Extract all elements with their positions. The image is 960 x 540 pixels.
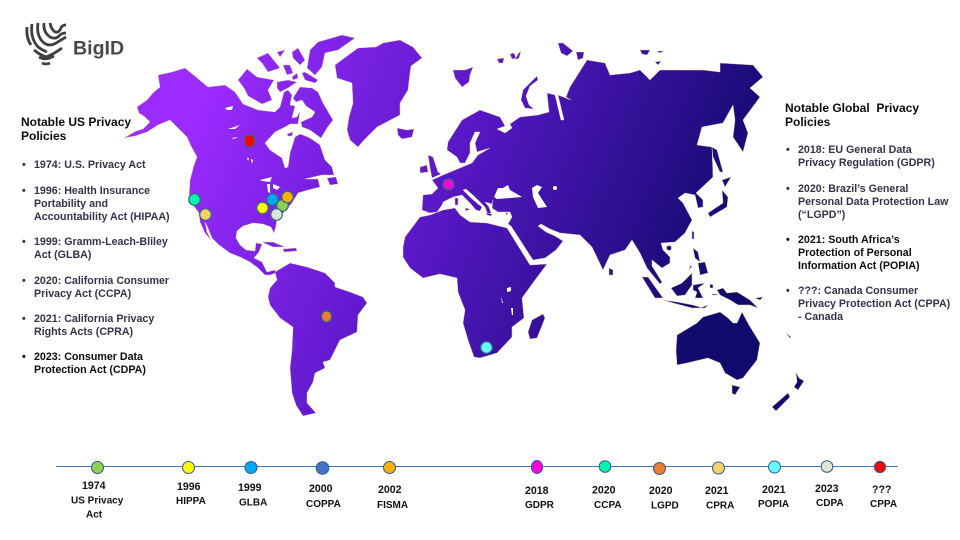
policy list: Protection Act (CDPA) (34, 364, 146, 376)
Ireland (420, 165, 428, 173)
milestone labels: 1996 (177, 481, 201, 493)
Eurasia (422, 60, 763, 284)
milestone labels: 2023 (815, 483, 839, 495)
marker: Canada CPPA (244, 135, 255, 147)
heading: Notable US Privacy (21, 115, 131, 129)
Iceland (397, 128, 414, 139)
policy list: 2021: California Privacy (34, 313, 154, 325)
milestone labels: GDPR (525, 500, 555, 511)
Timor (700, 305, 708, 308)
Great Britain (428, 155, 441, 178)
marker: LGPD (322, 311, 332, 322)
Severnaya Zemlya (558, 43, 584, 60)
marker: California CCPA (189, 194, 200, 205)
Novaya Zemlya (521, 76, 538, 109)
policy list: • (22, 313, 26, 325)
marker: CDPA (271, 209, 282, 220)
South America (268, 263, 367, 416)
Arctic islands (277, 50, 285, 57)
policy list: • (22, 185, 26, 197)
policy list: 2023: Consumer Data (34, 351, 143, 363)
milestone labels: Act (86, 510, 103, 520)
milestone labels: LGPD (651, 500, 679, 512)
marker: HIPPA (257, 202, 268, 214)
policy list: • (786, 234, 790, 246)
Caribbean islands (262, 242, 297, 252)
milestone labels: GLBA (239, 498, 267, 508)
Tasmania (732, 385, 740, 395)
marker: GLBA (267, 194, 278, 205)
Franz Josef Land (497, 51, 521, 63)
milestone labels: CPPA (870, 499, 897, 510)
Borneo (671, 273, 692, 296)
Greenland (335, 40, 422, 147)
Africa (403, 208, 547, 358)
panel: global privacy policies (785, 101, 951, 323)
Japan (708, 190, 728, 217)
milestone labels: COPPA (306, 499, 341, 510)
panel: US privacy policies (21, 115, 170, 376)
Baffin Island (293, 87, 333, 138)
milestone labels: 2020 (592, 484, 616, 496)
marker: FISMA (282, 191, 293, 203)
policy list: 2020: California Consumer (34, 275, 169, 287)
policy list: • (786, 285, 790, 297)
milestone labels: CCPA (594, 500, 622, 511)
Java (663, 300, 703, 308)
milestone labels: 1999 (238, 482, 262, 494)
policy list: Information Act (POPIA) (798, 260, 920, 272)
icon: fingerprint shield (27, 23, 66, 64)
Victoria Island (238, 69, 274, 104)
milestone labels: POPIA (758, 499, 789, 510)
Caspian Sea (532, 185, 547, 208)
heading: Policies (785, 115, 831, 129)
milestone labels: 2000 (309, 483, 333, 495)
policy list: • (22, 236, 26, 248)
policy list: 1996: Health Insurance (34, 185, 150, 197)
policy list: 2018: EU General Data (798, 144, 912, 156)
milestone labels: US Privacy (71, 496, 124, 506)
policy list: Rights Acts (CPRA) (34, 326, 134, 338)
marker: California CPRA (200, 209, 211, 220)
small Indonesian islands (689, 266, 717, 295)
policy list: Portability and (34, 198, 108, 210)
policy list: - Canada (798, 311, 843, 323)
New Siberian Islands (640, 50, 664, 65)
Svalbard (453, 67, 473, 87)
policy list: Privacy Regulation (GDPR) (798, 157, 935, 169)
Hainan (666, 246, 672, 250)
milestone labels: 2002 (378, 484, 402, 496)
policy list (22, 159, 170, 376)
milestone labels: CPRA (706, 500, 734, 512)
timeline (56, 460, 898, 520)
milestone labels: ??? (872, 484, 891, 496)
Ellesmere Island (307, 35, 355, 75)
Australia (676, 312, 760, 380)
Bismarck islands (755, 297, 791, 338)
Mediterranean islands (455, 198, 508, 216)
logo wordmark: BigID (73, 38, 124, 60)
Newfoundland (327, 177, 338, 185)
heading: Policies (21, 129, 67, 143)
marker: GDPR (443, 179, 454, 190)
policy list: • (22, 159, 26, 171)
milestone labels: FISMA (377, 500, 408, 511)
policy list: • (22, 351, 26, 363)
world map (124, 35, 804, 416)
Philippines (693, 248, 708, 275)
milestone labels (71, 480, 897, 520)
milestone labels: HIPPA (176, 496, 206, 507)
policy list (786, 144, 951, 323)
policy list: ???: Canada Consumer (798, 285, 918, 297)
heading: Notable Global Privacy (785, 101, 919, 115)
milestone labels: 2018 (525, 485, 549, 497)
New Guinea (717, 288, 758, 308)
New Zealand (772, 372, 804, 411)
North America (124, 68, 334, 275)
policy list: Protection of Personal (798, 247, 912, 259)
milestone labels: 1974 (82, 480, 106, 492)
Hokkaido (722, 177, 731, 187)
policy list: • (22, 275, 26, 287)
Banks Island (257, 53, 280, 72)
Aral Sea (553, 186, 557, 190)
African lakes (501, 287, 513, 315)
policy list: 2021: South Africa’s (798, 234, 900, 246)
Taiwan (692, 231, 694, 239)
Sulawesi (693, 283, 705, 298)
policy list: Act (GLBA) (34, 249, 92, 261)
policy list: Privacy Protection Act (CPPA) (798, 298, 951, 310)
Canadian and Great Lakes (225, 106, 280, 193)
policy list: 2020: Brazil’s General (798, 183, 908, 195)
Black Sea (494, 185, 522, 199)
map markers (189, 135, 492, 353)
Madagascar (528, 314, 545, 339)
milestones (92, 460, 886, 474)
milestone labels: CDPA (816, 498, 844, 509)
milestone labels: 2021 (762, 484, 786, 496)
policy list: • (786, 144, 790, 156)
Sakhalin (712, 147, 723, 172)
policy list: 1999: Gramm-Leach-Bliley (34, 236, 168, 248)
policy list: 1974: U.S. Privacy Act (34, 159, 146, 171)
Southampton Island (287, 132, 293, 136)
policy list: Personal Data Protection Law (798, 196, 949, 208)
Sri Lanka (609, 268, 613, 275)
marker: POPIA (481, 342, 492, 353)
marker: US Privacy Act (277, 200, 288, 211)
policy list: Privacy Act (CCPA) (34, 288, 132, 300)
milestone labels: 2020 (649, 485, 673, 497)
policy list: Accountability Act (HIPAA) (34, 211, 170, 223)
policy list: • (786, 183, 790, 195)
logo: BigID (27, 23, 124, 64)
policy list: (“LGPD”) (798, 209, 846, 221)
Sumatra (642, 277, 663, 298)
milestone labels: 2021 (705, 485, 729, 497)
